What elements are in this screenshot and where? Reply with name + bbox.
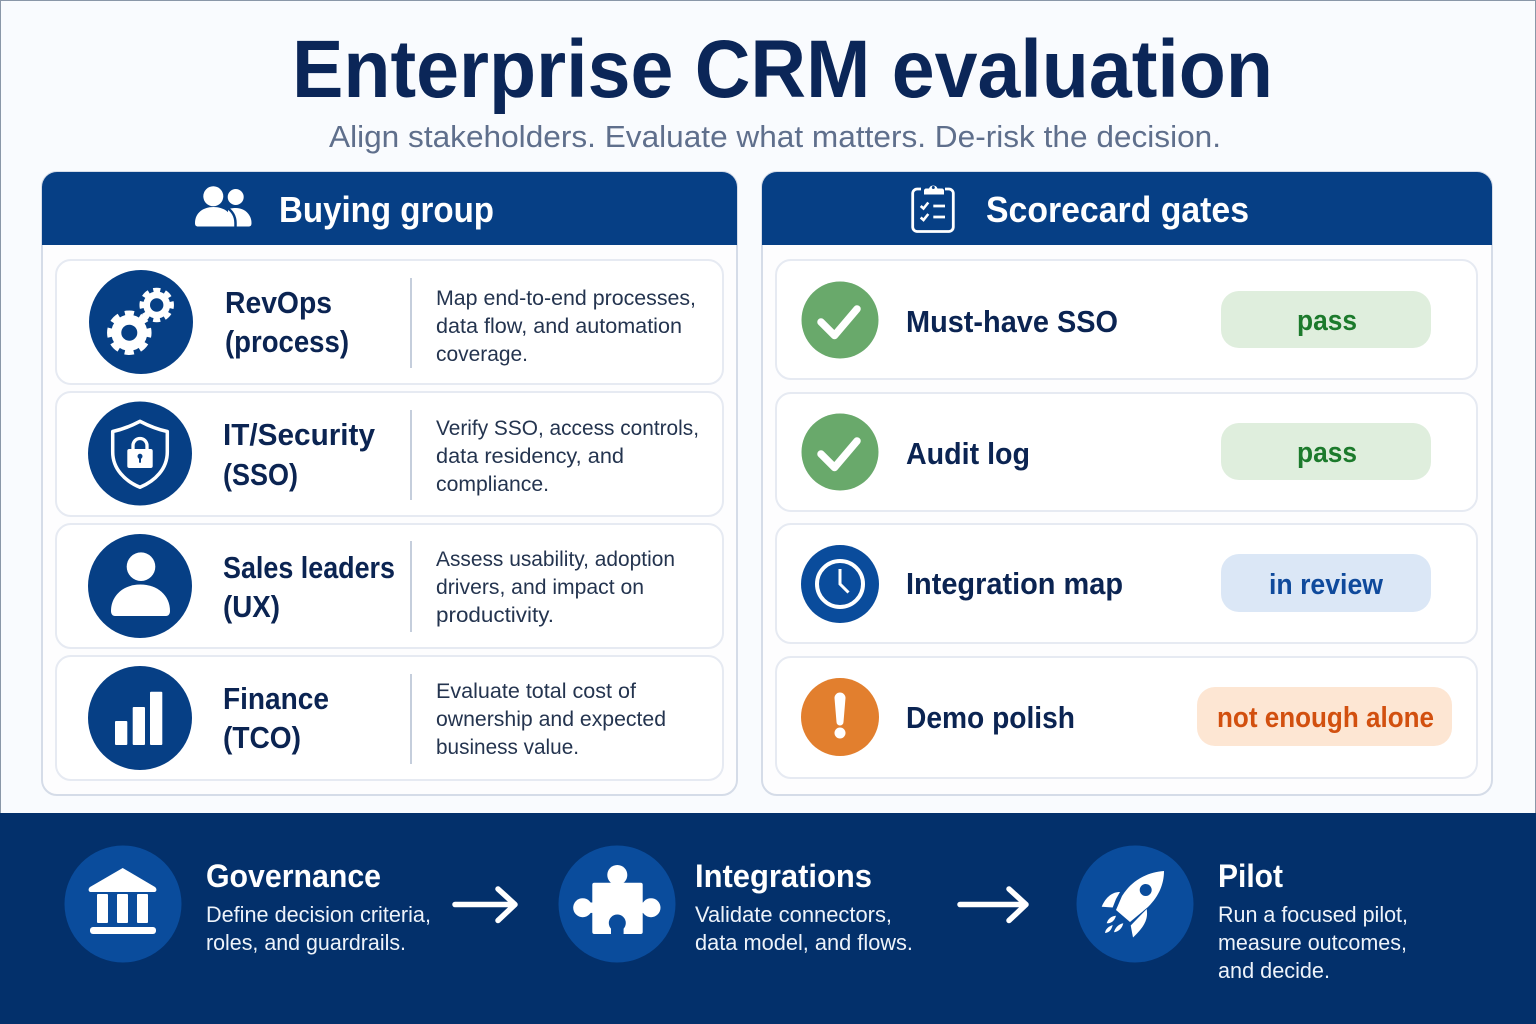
arrow: integrations to pilot bbox=[960, 889, 1026, 920]
gate: demo polish: Demo polish bbox=[906, 701, 1075, 735]
icon: puzzle piece bbox=[573, 865, 660, 935]
gate: audit log: Audit log bbox=[906, 437, 1030, 471]
step: pilot: Pilot bbox=[1218, 858, 1283, 894]
row: Sales leaders: Assess usability, adoption bbox=[436, 547, 675, 571]
step: pilot bbox=[1076, 846, 1408, 983]
step: pilot: Run a focused pilot, bbox=[1218, 902, 1408, 927]
step: integrations: Integrations bbox=[695, 858, 872, 894]
step: governance bbox=[64, 846, 431, 962]
row: IT/Security: IT/Security bbox=[223, 418, 375, 452]
title: Enterprise CRM evaluation bbox=[292, 24, 1273, 115]
row: IT/Security: (SSO) bbox=[223, 458, 298, 492]
step: integrations: data model, and flows. bbox=[695, 930, 913, 955]
step: governance: Define decision criteria, bbox=[206, 902, 431, 927]
gate: integration map: in review bbox=[1269, 569, 1383, 601]
row: Sales leaders: (UX) bbox=[223, 590, 280, 624]
gate: must-have SSO: pass bbox=[1297, 305, 1357, 337]
row: Sales leaders bbox=[56, 524, 723, 648]
row: IT/Security bbox=[56, 392, 723, 516]
row: Finance bbox=[56, 656, 723, 780]
row: Sales leaders: Sales leaders bbox=[223, 551, 395, 585]
row: Finance: ownership and expected bbox=[436, 707, 666, 731]
subtitle: Align stakeholders. Evaluate what matters. De-risk the decision. bbox=[329, 119, 1221, 154]
arrow: governance to integrations bbox=[455, 889, 515, 920]
gate: integration map bbox=[776, 524, 1477, 643]
panel: buying group bbox=[42, 172, 737, 795]
row: RevOps: coverage. bbox=[436, 342, 528, 366]
scorecard heading: Scorecard gates bbox=[986, 189, 1249, 230]
row: Sales leaders: productivity. bbox=[436, 603, 554, 627]
row: IT/Security: data residency, and bbox=[436, 444, 624, 468]
icon: institution building bbox=[89, 868, 156, 934]
icon: clipboard checklist bbox=[913, 185, 953, 232]
row: Sales leaders: drivers, and impact on bbox=[436, 575, 644, 599]
row: IT/Security: Verify SSO, access controls, bbox=[436, 416, 699, 440]
gate: audit log bbox=[776, 393, 1477, 511]
step: pilot: and decide. bbox=[1218, 958, 1330, 983]
icon: gears bbox=[110, 290, 172, 352]
icon: people bbox=[195, 186, 252, 226]
step: pilot: measure outcomes, bbox=[1218, 930, 1407, 955]
step: governance: Governance bbox=[206, 858, 381, 894]
gate: integration map: Integration map bbox=[906, 567, 1123, 601]
gate: must-have SSO bbox=[776, 260, 1477, 379]
icon: rocket bbox=[1102, 871, 1164, 938]
bottom band: process flow bbox=[0, 813, 1536, 1024]
icon: person bbox=[111, 552, 170, 616]
row: RevOps: RevOps bbox=[225, 286, 332, 320]
scorecard header bar bbox=[762, 172, 1492, 245]
row: RevOps bbox=[56, 260, 723, 384]
step: integrations bbox=[558, 846, 913, 962]
gate: demo polish bbox=[776, 657, 1477, 778]
row: Finance: Evaluate total cost of bbox=[436, 679, 636, 703]
gate: demo polish: not enough alone bbox=[1217, 702, 1434, 734]
row: Finance: (TCO) bbox=[223, 721, 301, 755]
row: RevOps: Map end-to-end processes, bbox=[436, 286, 696, 310]
row: Finance: Finance bbox=[223, 682, 329, 716]
icon: shield with lock bbox=[113, 421, 167, 487]
gate: must-have SSO: Must-have SSO bbox=[906, 305, 1118, 339]
row: RevOps: (process) bbox=[225, 325, 349, 359]
icon: bar chart bbox=[115, 692, 162, 745]
step: integrations: Validate connectors, bbox=[695, 902, 892, 927]
buying group heading: Buying group bbox=[279, 189, 494, 230]
gate: audit log: pass bbox=[1297, 437, 1357, 469]
row: IT/Security: compliance. bbox=[436, 472, 549, 496]
row: RevOps: data flow, and automation bbox=[436, 314, 682, 338]
buying group header bar bbox=[42, 172, 737, 245]
panel: scorecard gates bbox=[762, 172, 1492, 795]
step: governance: roles, and guardrails. bbox=[206, 930, 406, 955]
row: Finance: business value. bbox=[436, 735, 579, 759]
